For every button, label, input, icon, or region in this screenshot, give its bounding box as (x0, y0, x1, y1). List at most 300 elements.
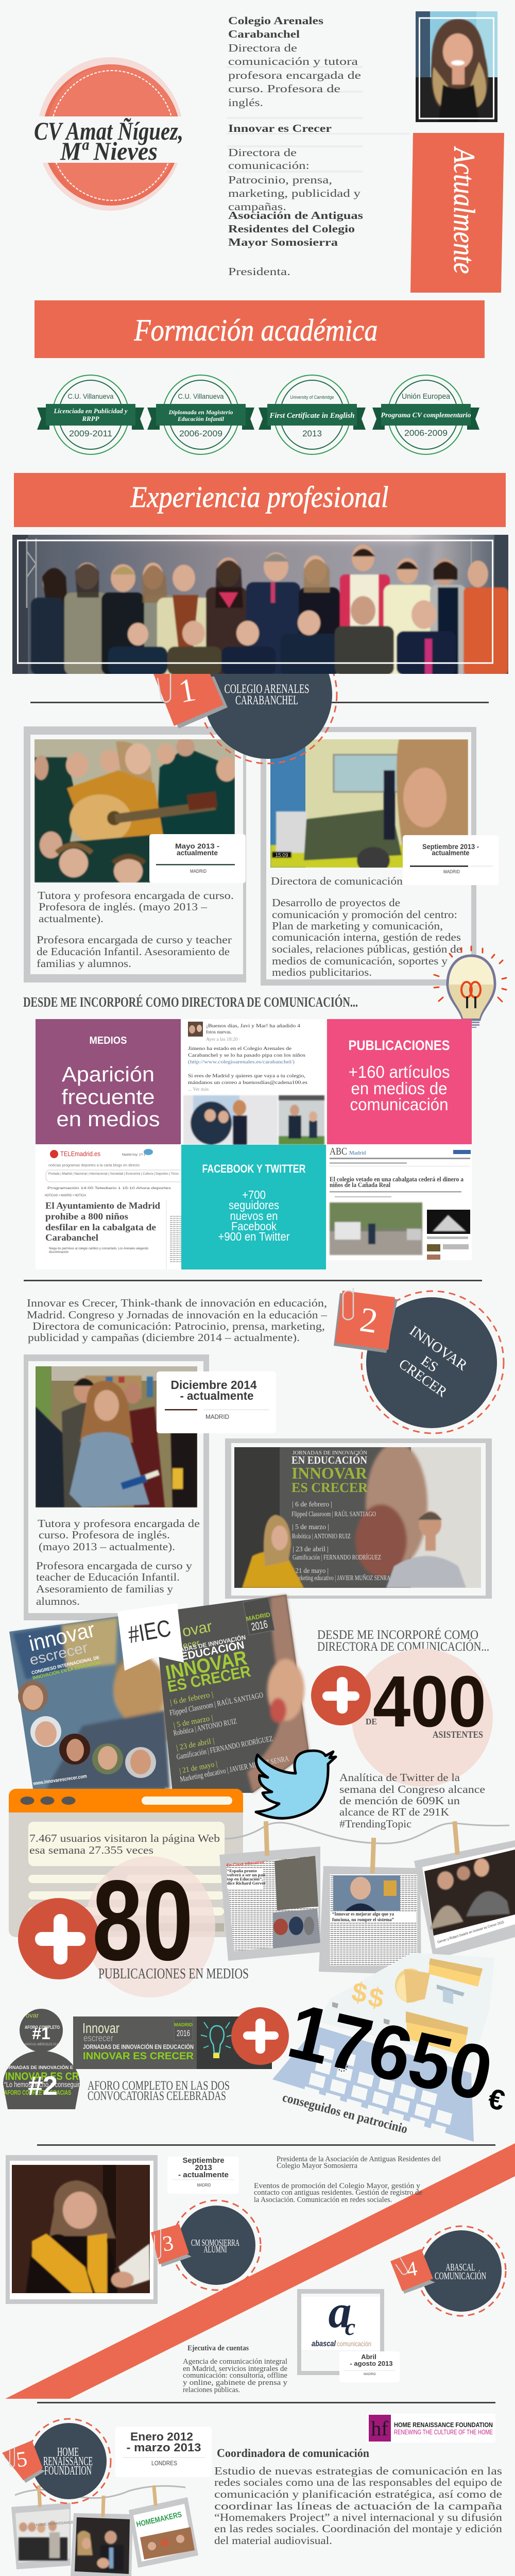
banner innovar: JORNADAS DE INNOVACIÓN EN EDUCACIÓN (83, 2043, 194, 2050)
tile: medios: Aparición (62, 1062, 154, 1086)
circle 5: Home Renaissance Foundation: FOUNDATION (44, 2464, 92, 2478)
tile: publicaciones: comunicación (350, 1095, 448, 1114)
poster left: congreso (9, 1616, 170, 1789)
date note: Septiembre 2013 (167, 2156, 239, 2194)
bubble #2: INNOVAR ES CR (5, 2071, 79, 2082)
note 3 (151, 2224, 192, 2267)
date note: Septiembre 2013: 2013 (195, 2163, 212, 2172)
circle 4: Abascal Comunicación: COMUNICACIÓN (435, 2269, 486, 2282)
tile: telemadrid clipping: NOTICIAS > MADRID > NOTICIA (45, 1194, 87, 1197)
poster left: congreso: www.innovarescrecer.com (32, 1773, 87, 1787)
card: tutora: Profesora de inglés. (mayo 2013 – (39, 901, 208, 913)
card: directora de comunicación (261, 727, 499, 986)
date note: Septiembre 2013: - actualmente (178, 2171, 229, 2179)
bubble #2: AFORO COMPLETO GRACIAS (4, 2089, 71, 2096)
card: directora de comunicación: comunicación y promoción del centro: (272, 908, 457, 921)
badge: Licenciada: Licenciada en Publicidad y (54, 407, 128, 415)
circle 3: CM Somosierra Alumni (172, 2200, 261, 2290)
card: jornadas photo: Marketing educativo | JAVIER MUÑOZ SENRA (293, 1574, 391, 1582)
date note: MADRID (364, 2373, 376, 2376)
poster right: jornadas: Robótica | ANTONIO RUIZ (173, 1717, 237, 1738)
bubble #1: #1 (32, 2024, 50, 2043)
portrait photo (416, 11, 497, 122)
poster right: jornadas (154, 1595, 309, 1793)
circle 5: Home Renaissance Foundation (27, 2419, 111, 2503)
date note (157, 1371, 276, 1433)
badge: Diplomada: Educación Infantil (177, 416, 225, 422)
banner innovar: Innovar (82, 2020, 119, 2036)
tile: facebook post: Ayer a las 18:20 · (206, 1037, 241, 1042)
badge: Programa CV (372, 375, 479, 454)
text: coordinadora de comunicación: Coordinadora de comunicación (217, 2447, 369, 2460)
tile: facebook post: mándanos un correo a buenosdías@cadena100.es (188, 1080, 307, 1086)
browser window panel (9, 1789, 243, 1937)
card: innovar tutora (24, 1354, 276, 1620)
tile: ABC clipping: El colegio vetado en una cabalgata cederá el dinero a (330, 1175, 464, 1183)
badge: Diplomada (147, 375, 254, 454)
card: tutora: Profesora encargada de curso y teacher (37, 934, 232, 946)
card: directora de comunicación: comunicación interna, gestión de redes (272, 931, 461, 943)
twitter analytics text: semana del Congreso alcance (339, 1783, 485, 1795)
date note: Septiembre 2013 - (422, 842, 479, 851)
circle 3: CM Somosierra Alumni: ALUMNI (204, 2244, 227, 2255)
date note: Enero 2012: - marzo 2013 (127, 2441, 201, 2454)
card: jornadas photo: Flipped Classroom | RAÚL SANTIAGO (291, 1510, 376, 1518)
tile: medios (36, 1019, 181, 1144)
tile: ABC clipping: Madrid (349, 1150, 366, 1156)
bookmark: #IEC: #IEC (126, 1614, 173, 1648)
twitter analytics text: Analítica de Twitter de la (339, 1771, 460, 1784)
poster right: jornadas: | 5 de marzo | (173, 1714, 214, 1730)
badge: Licenciada: 2009-2011 (69, 429, 112, 438)
stat panel: +400 asistentes (311, 1628, 493, 1787)
poster left: congreso: innovar (26, 1617, 97, 1656)
card: directora de comunicación: medios publicitarios. (272, 966, 372, 978)
title badge (34, 57, 184, 211)
note 5: 5 (15, 2447, 29, 2472)
card: tutora (24, 726, 246, 982)
current positions text: Presidenta. (228, 265, 290, 278)
tile: telemadrid clipping: TELEmadrid.es (60, 1150, 100, 1158)
card: tutora: familias y alumnos. (37, 957, 131, 970)
bubble #2: “Lo hemos hecho a conseguir (4, 2080, 80, 2089)
date note: actualmente (432, 849, 470, 857)
heading: Formación académica: Formación académica (134, 313, 378, 347)
circle 1: Colegio Arenales Carabanchel: CARABANCHEL (235, 693, 298, 707)
current positions text: Mayor Somosierra (228, 236, 338, 248)
card: jornadas photo (225, 1438, 492, 1599)
photo string: home renaissance (11, 2485, 198, 2576)
tile: ABC clipping: niños de la Cañada Real (330, 1181, 390, 1189)
date note: MADRID (205, 1413, 229, 1420)
innovar intro text: Directora de comunicación: Patrocinio, prensa, marketing, (32, 1320, 325, 1332)
card: innovar tutora: Asesoramiento de familias y (36, 1583, 174, 1595)
bookmark: #IEC (117, 1603, 184, 1671)
card: innovar tutora: (mayo 2013 – actualmente). (39, 1540, 175, 1553)
card: innovar tutora: Profesora encargada de curso y (36, 1560, 193, 1572)
poster right: jornadas: Flipped Classroom | RAÚL SANTIAGO (169, 1691, 264, 1718)
banner innovar: INNOVAR ES CRECER (83, 2051, 194, 2062)
text: ejecutiva de cuentas: y online, gabinete de prensa y (183, 2379, 288, 2387)
badge: Diplomada: C.U. Villanueva (178, 392, 224, 400)
circle 5: Home Renaissance Foundation: HOME (57, 2446, 79, 2459)
banner innovar: MADRID (174, 2022, 193, 2027)
card: directora de comunicación: sociales, relaciones públicas, gestión de (272, 943, 461, 955)
text: coordinadora de comunicación (214, 2447, 503, 2547)
twitter analytics text: #TrendingTopic (339, 1818, 411, 1830)
tile: facebook y twitter: seguidores (229, 1198, 279, 1212)
text: coordinadora de comunicación: del material audiovisual. (214, 2534, 332, 2547)
clipping: polaroid 1: top en Educación”, (227, 1876, 263, 1882)
lightbulb icon (434, 946, 506, 1028)
tile: medios: MEDIOS (90, 1035, 127, 1046)
current positions text: inglés. (228, 96, 263, 109)
card: directora de comunicación: Desarrollo de proyectos de (272, 896, 400, 909)
note 2 (334, 1288, 398, 1353)
heading: Formación académica (35, 300, 485, 358)
innovar intro text: Madrid. Congreso y Jornadas de innovación en la educación – (27, 1309, 328, 1321)
text: ejecutiva de cuentas: relaciones públicas. (183, 2386, 240, 2394)
date note: Enero 2012: LONDRES (151, 2460, 177, 2467)
badge: Diplomada: 2006-2009 (179, 429, 222, 438)
tile: ABC clipping: ABC (330, 1146, 347, 1157)
poster right: jornadas: Gamificación | FERNANDO RODRÍGUEZ (176, 1734, 273, 1761)
text: ejecutiva de cuentas: comunicación: consultoría, offline (183, 2371, 287, 2380)
card: innovar tutora: alumnos. (36, 1595, 80, 1607)
badge: Licenciada: RRPP (81, 415, 100, 422)
clipping: polaroid 2 (319, 1866, 421, 1975)
text: Somosierra: Colegio Mayor Somosierra (277, 2162, 357, 2170)
innovar intro text: publicidad y campañas (diciembre 2014 – actualmente). (28, 1331, 300, 1344)
bubble #2: #2 (28, 2071, 58, 2101)
polaroid 1: HOME RENAISSANCE FO (36, 2520, 80, 2527)
card: jornadas photo: | 21 de mayo | (293, 1567, 329, 1575)
tile: ABC clipping (327, 1144, 472, 1260)
innovar intro text: Innovar es Crecer, Think-thank de innovación en educación, (27, 1297, 327, 1309)
card: tutora: actualmente). (39, 912, 104, 925)
polaroid 1 (11, 2503, 80, 2569)
poster right: jornadas: | 23 de abril | (176, 1737, 215, 1752)
note 3: 3 (161, 2231, 175, 2256)
polaroid 3 (129, 2497, 198, 2568)
tile: telemadrid clipping: Madrid hoy: 1º/ 1º (122, 1153, 147, 1157)
text: ejecutiva de cuentas: Ejecutiva de cuentas (187, 2344, 249, 2352)
card: abascal logo: a (329, 2286, 351, 2337)
tile: facebook post: ... Ver más (188, 1087, 209, 1092)
note 2: 2 (357, 1299, 380, 1341)
heading: Experiencia profesional: Experiencia profesional (130, 480, 388, 514)
tile: facebook post: (http://www.colegioarenales.es/carabanchel/) (188, 1059, 295, 1065)
tile: telemadrid clipping: Carabanchel (45, 1232, 98, 1243)
tile: publicaciones (327, 1019, 472, 1144)
stat: +80 publicaciones (18, 1856, 249, 1997)
card: abascal logo: c (345, 2314, 355, 2340)
badge: First Certificate: University of Cambridge (290, 395, 334, 400)
date note (149, 834, 246, 883)
poster right: jornadas: MADRID (245, 1611, 271, 1623)
tile: telemadrid clipping: Portada | Madrid | Nacional | Internacional | Sociedad | Economía | Cultura | Deportes | Toros (48, 1172, 179, 1176)
text: Somosierra: Presidenta de la Asociación de Antiguas Residentes del (277, 2155, 441, 2163)
tile: telemadrid clipping: Programación 14:00 Telediario 1 15:10 Ahora deportes (47, 1187, 171, 1190)
date note: Septiembre 2013: Septiembre (182, 2156, 225, 2165)
aforo completo panel: CONVOCATORIAS CELEBRADAS (88, 2089, 226, 2103)
poster left: congreso: INNOVACIÓN EN LA EDUCACIÓN (32, 1659, 101, 1681)
tile: telemadrid clipping (36, 1144, 185, 1269)
stat panel: +400 asistentes: 400 (373, 1660, 486, 1742)
text: Somosierra: la Asociación. Comunicación en redes sociales. (254, 2196, 392, 2204)
photo: woman in blue dress (36, 1366, 197, 1507)
group photo (12, 535, 508, 675)
current positions text: Directora de (228, 146, 297, 159)
note 1 (153, 671, 228, 728)
heading: Experiencia profesional (14, 473, 506, 527)
stat: +17650 euros: € (485, 2082, 508, 2117)
badge: Programa CV: Unión Europea (402, 392, 451, 401)
bubble #2 (3, 2051, 80, 2109)
tile: facebook y twitter: Facebook (231, 1219, 277, 1233)
banner: Actualmente (410, 133, 504, 293)
note 5 (2, 2441, 45, 2483)
keyboard keys (303, 2043, 458, 2140)
date note: actualmente (177, 849, 218, 857)
current positions text: comunicación y tutora (228, 55, 358, 67)
clipping: polaroid 1: En Clave educativa (226, 1860, 264, 1868)
poster right: jornadas: ovar (181, 1618, 214, 1640)
browser window panel: 7.467 usuarios visitaron la página Web (29, 1832, 220, 1844)
browser window panel: esa semana 27.355 veces (29, 1844, 153, 1856)
current positions text: Innovar es Crecer (228, 122, 332, 134)
current positions text: profesora encargada de (228, 69, 361, 81)
tile: telemadrid clipping: prohibe a 800 niños (45, 1211, 128, 1222)
illustration: money and keyboard: $ (366, 1982, 386, 2014)
aforo completo panel (3, 2009, 272, 2109)
innovar intro text (27, 1297, 328, 1344)
card: jornadas photo: Gamificación | FERNANDO RODRÍGUEZ (293, 1553, 381, 1562)
illustration: money and keyboard: $ (350, 1977, 369, 2009)
badge: Programa CV: 2006-2009 (404, 428, 448, 438)
circle 2: Innovar es Crecer: INNOVAR (406, 1323, 470, 1374)
circle 5: Home Renaissance Foundation: RENAISSANCE (43, 2455, 93, 2468)
card: abascal logo: comunicación (337, 2340, 371, 2348)
circle 2: Innovar es Crecer (362, 1291, 504, 1433)
current positions text: curso. Profesora de (228, 82, 340, 95)
tile: facebook post: Carabanchel y se lo ha pasado pipa con los niños (188, 1053, 305, 1058)
clipping: polaroid 2: funciona, no romper el sistema” (332, 1917, 394, 1922)
bubble #1: HASTA EL MIÉRCOLES 23 A (25, 2043, 58, 2046)
card: tutora: Tutora y profesora encargada de curso. (38, 889, 234, 902)
current positions text: comunicación: (228, 159, 310, 172)
text: ejecutiva de cuentas: Agencia de comunicación integral (183, 2358, 287, 2366)
current positions text: Patrocinio, prensa, (228, 174, 332, 186)
text: Somosierra: contacto con antiguas residentes. Gestión de registro de (254, 2189, 422, 2197)
tile: facebook post: Jimeno ha estado en el Colegio Arenales de (188, 1046, 291, 1052)
tile: facebook y twitter: +900 en Twitter (218, 1230, 290, 1243)
clipping: polaroid 3 (414, 1840, 515, 1959)
banner: Actualmente: Actualmente (448, 146, 481, 274)
stat: +80 publicaciones: 80 (92, 1857, 193, 1985)
card: jornadas photo: | 6 de febrero | (292, 1501, 332, 1509)
text: coordinadora de comunicación: Estudio de nuevas estrategias de comunicación en las (214, 2465, 502, 2477)
date note: - agosto 2013 (350, 2360, 392, 2367)
poster right: jornadas: 2016 (250, 1618, 269, 1633)
tile: facebook post: fotos nuevas. (206, 1029, 232, 1035)
current positions text: marketing, publicidad y (228, 187, 361, 199)
photo: guitar class (34, 738, 237, 885)
tile: publicaciones: +160 artículos (348, 1062, 450, 1081)
poster right: jornadas: ecer (182, 1638, 201, 1651)
text: coordinadora de comunicación: redes sociales como una de las responsables del equipo de (214, 2476, 502, 2488)
banner innovar (73, 2016, 272, 2069)
date note: Enero 2012: Enero 2012 (130, 2430, 193, 2443)
stat panel: +400 asistentes: DE (366, 1717, 377, 1726)
title badge: CV Amat Ñíguez, (34, 116, 183, 145)
text: coordinadora de comunicación: “Homemakers Project” a nivel internacional y su difusión (214, 2511, 503, 2523)
card: directora de comunicación: Plan de marketing y comunicación, (272, 920, 443, 932)
date note: MADRID (190, 869, 207, 874)
bubble #1 (20, 2009, 63, 2052)
badge: First Certificate: First Certificate in English (269, 412, 355, 420)
tile: medios: frecuente (62, 1085, 154, 1109)
twitter analytics text: de mención de 609K un (339, 1794, 460, 1807)
aforo completo panel: AFORO COMPLETO EN LAS DOS (88, 2079, 230, 2093)
poster right: jornadas: ADAS DE INNOVACIÓN (179, 1633, 246, 1653)
badge: Diplomada: Diplomada en Magisterio (168, 410, 233, 416)
card: jornadas photo: | 23 de abril | (293, 1546, 329, 1553)
poster right: jornadas: Marketing educativo | JAVIER MUÑOZ SENRA (179, 1755, 289, 1784)
date note: MADRID (443, 869, 460, 874)
card: jornadas photo: | 5 de marzo | (292, 1523, 329, 1531)
tile: telemadrid clipping: desfilar en la cabalgata de (45, 1222, 156, 1232)
date note: Enero 2012 (115, 2427, 212, 2477)
poster right: jornadas: | 21 de mayo | (179, 1760, 218, 1775)
date note (403, 835, 499, 885)
tile: facebook y twitter: FACEBOOK Y TWITTER (202, 1162, 306, 1175)
tile: publicaciones: en medios de (351, 1079, 447, 1098)
tile: publicaciones: PUBLICACIONES (348, 1038, 450, 1053)
poster right: jornadas: | 6 de febrero | (169, 1690, 214, 1707)
card: jornadas photo: INNOVAR (291, 1464, 368, 1482)
circle 4: Abascal Comunicación: ABASCAL (446, 2262, 475, 2273)
current positions text: Residentes del Colegio (228, 223, 355, 235)
card: abascal logo (297, 2286, 400, 2382)
tile: medios: en medios (57, 1107, 160, 1131)
text: coordinadora de comunicación: coordinar las líneas de actuación de la campaña (214, 2500, 503, 2512)
heading: since I joined: DESDE ME INCORPORÉ COMO DIRECTORA DE COMUNICACIÓN... (23, 994, 358, 1010)
date note: Abril (361, 2353, 376, 2361)
banner innovar: 2016 (177, 2028, 190, 2038)
card: jornadas photo: Robótica | ANTONIO RUIZ (292, 1533, 351, 1540)
date note (339, 2351, 400, 2382)
current positions text: Asociación de Antiguas (228, 209, 363, 222)
twitter analytics text (339, 1771, 485, 1830)
tile: facebook y twitter (181, 1145, 326, 1269)
clipping: polaroid 1: “España pronto (227, 1868, 257, 1873)
card: directora de comunicación: Directora de comunicación (271, 875, 403, 887)
diagonal band (5, 2143, 515, 2399)
logo: Home Renaissance Foundation (367, 2414, 495, 2443)
photo: model city interview: 15:09 (275, 853, 288, 858)
logo: Home Renaissance Foundation: HOME RENAISSANCE FOUNDATION (394, 2421, 493, 2429)
stat: +17650 euros: 17650 (281, 1987, 500, 2117)
poster right: jornadas: EDUCACIÓN (180, 1638, 245, 1663)
tile: facebook post: ¡Buenos días, Javi y Mar! ha añadido 4 (206, 1024, 300, 1029)
text: coordinadora de comunicación: comunicación y planificación estratégica, así como de (214, 2488, 502, 2500)
circle 1: Colegio Arenales Carabanchel (199, 625, 337, 764)
badge: First Certificate: 2013 (302, 429, 322, 438)
poster left: congreso: escrecer (28, 1639, 89, 1668)
tile: telemadrid clipping: El Ayuntamiento de Madrid (45, 1200, 160, 1211)
card: jornadas photo: JORNADAS DE INNOVACIÓN (293, 1450, 367, 1456)
bubble #1: AFORO COMPLETO (25, 2025, 60, 2030)
tile: telemadrid clipping: noticias programas deportes a la carta blogs en directo (48, 1164, 140, 1167)
note 1: 1 (176, 671, 198, 710)
current positions text: Carabanchel (228, 28, 300, 40)
date note: Septiembre 2013: MADRID (197, 2183, 211, 2188)
date note: Mayo 2013 - (175, 842, 219, 850)
note 4 (390, 2249, 435, 2294)
tile: telemadrid clipping: discriminación (49, 1251, 68, 1254)
card: innovar tutora: curso. Profesora de inglés. (39, 1529, 170, 1541)
clipping: polaroid 3: Gerver y Robert Swartz en Innovar es Crecer 2015 (437, 1921, 505, 1944)
section 2 divider (24, 1280, 482, 1281)
polaroid 3: HOMEMAKERS (135, 2510, 183, 2529)
card: graduation photo (6, 2155, 158, 2304)
poster right: jornadas: ES CRECER (166, 1662, 252, 1696)
current positions text: Colegio Arenales (228, 14, 323, 27)
stat panel: +400 asistentes: ASISTENTES (433, 1730, 483, 1740)
badge: Licenciada: C.U. Villanueva (68, 392, 114, 400)
stat panel: +400 asistentes: DESDE ME INCORPORÉ COMO (317, 1628, 478, 1642)
circle 3: CM Somosierra Alumni: CM SOMOSIERRA (191, 2238, 239, 2248)
badge: First Certificate (259, 375, 366, 454)
current positions text: campañas. (228, 200, 286, 213)
section 4 divider (37, 2402, 495, 2403)
card: jornadas photo: EN EDUCACIÓN (291, 1454, 367, 1466)
tile: facebook post: Si eres de Madrid y quieres que vaya a tu colegio, (188, 1074, 305, 1079)
photo: model city interview (270, 739, 468, 874)
poster left: congreso: CONGRESO INTERNACIONAL DE (31, 1655, 100, 1675)
badge: Licenciada (37, 375, 144, 454)
card: tutora: de Educación Infantil. Asesoramiento de (37, 945, 230, 958)
date note: - actualmente (180, 1389, 253, 1402)
card: innovar tutora: teacher de Educación Infantil. (36, 1571, 180, 1583)
section 3 divider (37, 2144, 495, 2146)
circle 2: Innovar es Crecer: ES (418, 1353, 441, 1376)
tile: facebook y twitter: +700 (242, 1188, 266, 1201)
photo string with pinned clippings (219, 1821, 515, 1975)
stat: +80 publicaciones: PUBLICACIONES EN MEDIOS (98, 1966, 249, 1982)
clipping: polaroid 2: “Innovar es mejorar algo que ya (332, 1911, 394, 1917)
current positions text (227, 14, 410, 278)
clipping: polaroid 1 (219, 1846, 320, 1961)
circle 2: Innovar es Crecer: CRECER (396, 1356, 450, 1400)
text: coordinadora de comunicación: en las redes sociales. Coordinación del montaje y edición (214, 2522, 503, 2535)
tile: telemadrid clipping: Niega los permisos al colegio católico y concertado, Los Arenales alegando (49, 1247, 149, 1250)
card: abascal logo: abascal (312, 2340, 336, 2348)
banner innovar: escrecer (83, 2033, 113, 2043)
text: ejecutiva de cuentas (183, 2344, 288, 2394)
text: ejecutiva de cuentas: en Madrid, servicios integrales de (183, 2365, 287, 2373)
circle 4: Abascal Comunicación (417, 2226, 506, 2316)
text: Somosierra (254, 2155, 441, 2204)
illustration: money and keyboard (272, 1953, 494, 2142)
card: innovar tutora: Tutora y profesora encargada de (38, 1517, 200, 1530)
card: jornadas photo: ES CRECER (291, 1480, 368, 1495)
polaroid 2 (71, 2513, 133, 2576)
twitter analytics text: alcance de RT de 291K (339, 1806, 449, 1818)
stat: +17650 euros: conseguidos en patrocinio (281, 2091, 409, 2137)
text: Somosierra: Eventos de promoción del Colegio Mayor, gestión y (254, 2182, 421, 2190)
